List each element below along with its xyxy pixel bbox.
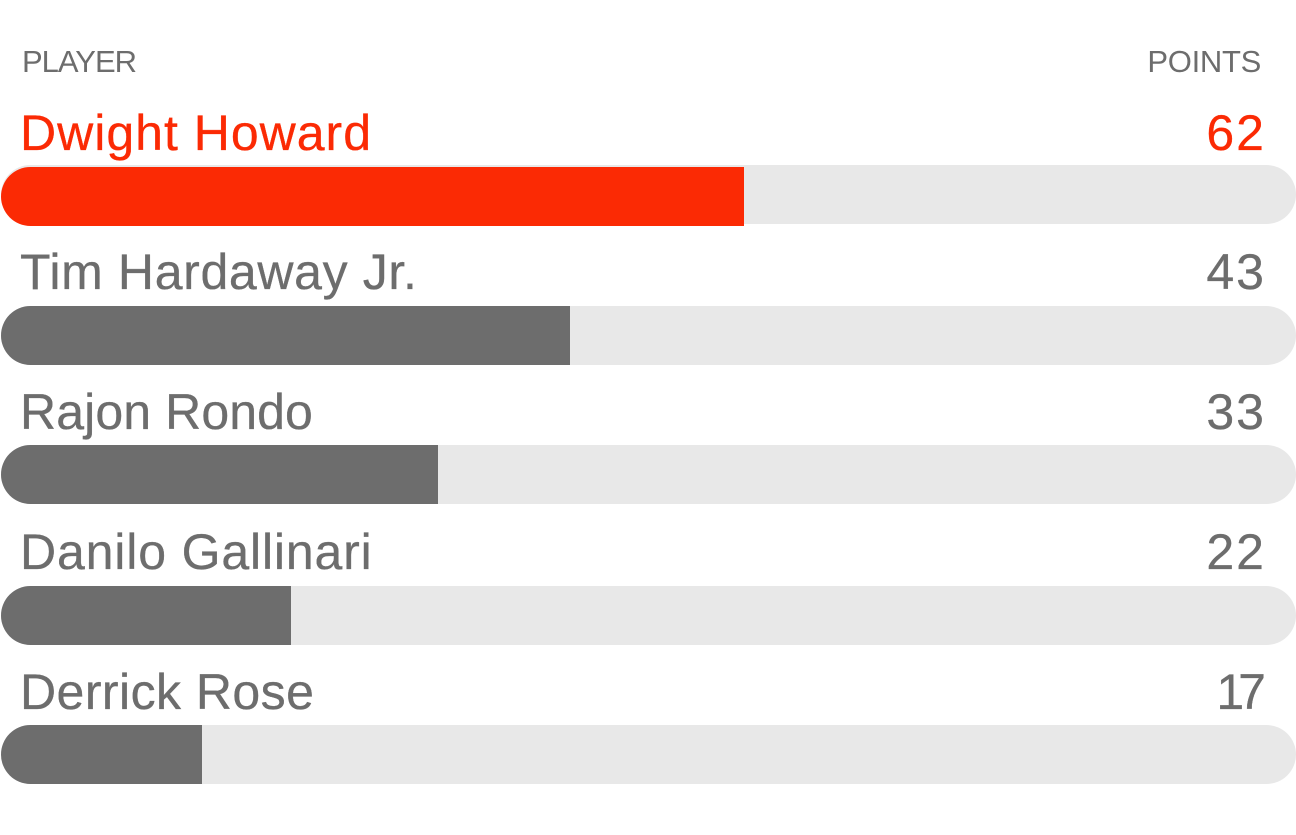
column heading: player: PLAYER	[22, 44, 136, 79]
points value: 33	[1206, 384, 1266, 440]
bar: 43 points	[1, 306, 1296, 365]
bar: 17 points	[1, 725, 1296, 784]
player name: Tim Hardaway Jr.	[20, 244, 418, 300]
bar: 62 points	[1, 165, 1296, 224]
player name: Danilo Gallinari	[20, 524, 373, 580]
points value: 22	[1206, 524, 1266, 580]
row: Tim Hardaway Jr.	[1, 244, 1296, 365]
row: Dwight Howard	[1, 105, 1296, 226]
points value: 43	[1206, 244, 1266, 300]
row: Rajon Rondo	[1, 384, 1296, 504]
player name: Rajon Rondo	[20, 384, 313, 440]
row: Derrick Rose	[1, 664, 1296, 784]
player name: Derrick Rose	[20, 664, 314, 720]
bar: 22 points	[1, 586, 1296, 645]
row: Danilo Gallinari	[1, 524, 1296, 645]
column heading: points: POINTS	[1147, 44, 1261, 79]
bar: 33 points	[1, 445, 1296, 504]
points value: 17	[1216, 664, 1260, 720]
player name: Dwight Howard	[20, 105, 372, 161]
points value: 62	[1206, 105, 1266, 161]
